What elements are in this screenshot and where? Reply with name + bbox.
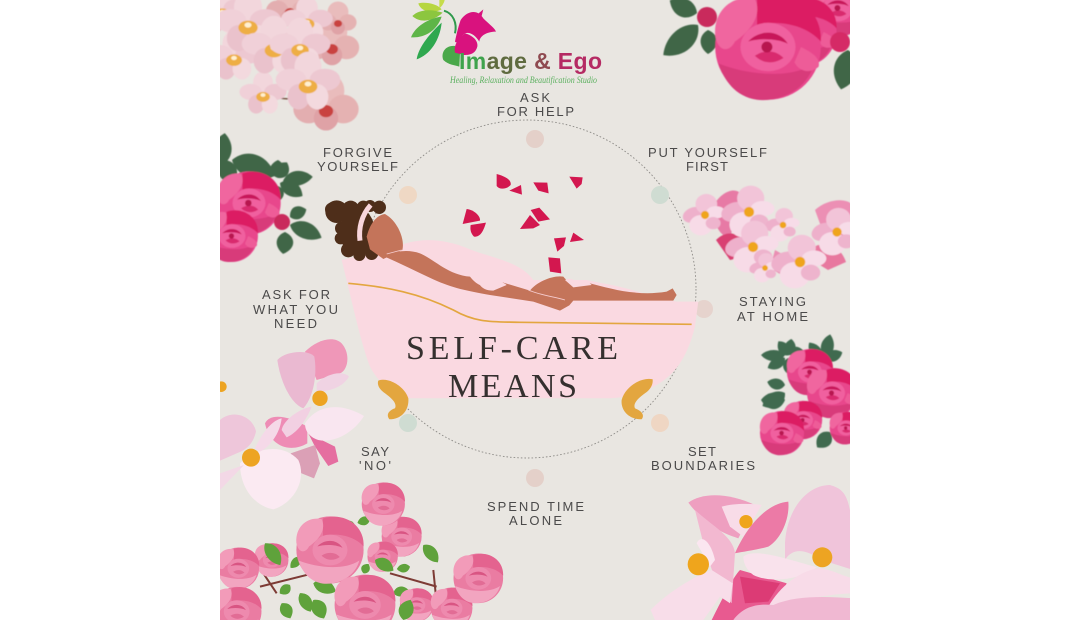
label: forgive yourself [317, 145, 398, 174]
label: ask for what you need: NEED [274, 316, 317, 331]
rose petals [463, 174, 584, 273]
label: forgive yourself: FORGIVE [323, 145, 392, 160]
label: ask for what you need: ASK FOR [262, 287, 330, 302]
flowers: left azalea [220, 132, 322, 263]
flowers: right azalea cluster [759, 334, 850, 456]
flowers: lower-left begonias [216, 339, 364, 509]
dashed circle [358, 120, 696, 458]
label: say no: SAY [361, 444, 389, 459]
tub and foam [342, 240, 698, 398]
tub rim line [348, 283, 692, 324]
foam over body [479, 282, 507, 291]
label: put yourself first: PUT YOURSELF [648, 145, 767, 160]
infographic canvas [220, 0, 850, 620]
label: set boundaries: SET [688, 444, 716, 459]
body [383, 251, 677, 311]
label: ask for help: ASK [520, 90, 550, 105]
marker dots [399, 130, 713, 487]
hair [325, 200, 386, 261]
label: ask for help [497, 90, 574, 119]
label: set boundaries: BOUNDARIES [651, 458, 755, 473]
flowers: bottom-right begonias [651, 485, 853, 620]
flowers: bottom roses [212, 482, 503, 620]
logo wordmark: Image & Ego [459, 48, 602, 74]
label: staying at home: AT HOME [737, 309, 808, 324]
title [406, 330, 618, 405]
label: say no: 'NO' [359, 458, 391, 473]
label: set boundaries [651, 444, 755, 473]
title: SELF-CARE [406, 330, 618, 367]
logo [411, 0, 602, 85]
background panel [220, 0, 850, 620]
title: MEANS [448, 368, 577, 405]
label: spend time alone [487, 499, 584, 528]
bathtub with woman [325, 200, 698, 419]
label: ask for help: FOR HELP [497, 104, 574, 119]
logo tagline: Healing, Relaxation and Beautification Studio [449, 75, 597, 85]
headband [360, 205, 371, 241]
right foot [622, 379, 653, 419]
flowers: top-right azalea [657, 0, 867, 100]
label: put yourself first: FIRST [686, 159, 728, 174]
label: spend time alone: SPEND TIME [487, 499, 584, 514]
label: ask for what you need: WHAT YOU [253, 302, 338, 317]
logo woman silhouette [455, 9, 496, 55]
label: staying at home [737, 294, 808, 324]
label: say no [359, 444, 391, 473]
arm line [387, 250, 565, 300]
flowers: right pink begonias [681, 186, 860, 288]
flowers: top-left orchids [220, 0, 360, 131]
label: forgive yourself: YOURSELF [317, 159, 398, 174]
label: ask for what you need [253, 287, 338, 331]
face [367, 214, 403, 259]
left foot [378, 380, 408, 419]
label: put yourself first [648, 145, 767, 174]
label: staying at home: STAYING [739, 294, 806, 309]
logo leaves [411, 0, 460, 67]
label: spend time alone: ALONE [509, 513, 562, 528]
